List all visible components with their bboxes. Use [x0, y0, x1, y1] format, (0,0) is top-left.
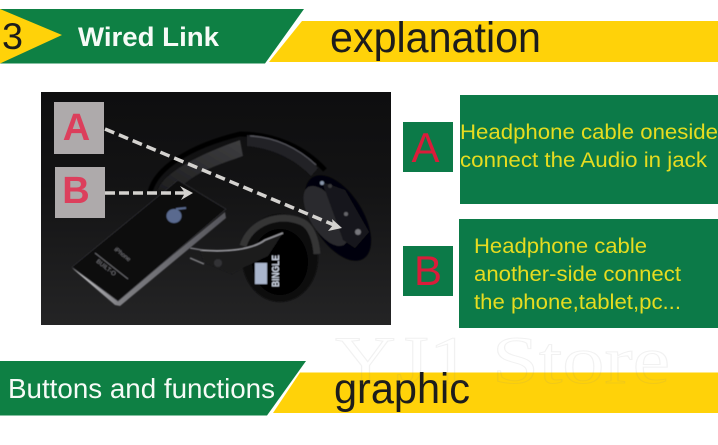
label box A [54, 102, 104, 154]
icon: smartphone: BUILT-O [95, 259, 117, 278]
label box B [55, 167, 105, 218]
padded band section [158, 140, 243, 192]
title: Wired Link: Wired Link [78, 22, 220, 52]
phone back [72, 180, 226, 301]
badge B: B [414, 247, 442, 294]
description A: Headphone cable oneside [460, 121, 718, 144]
panel: explanation A [403, 95, 718, 204]
lower arm [200, 235, 282, 268]
panel: explanation B [403, 219, 718, 328]
icon: smartphone: iPhone [113, 247, 132, 263]
text panel B [459, 219, 718, 328]
badge A: A [411, 124, 440, 171]
text panel A [460, 95, 718, 204]
heading: graphic: graphic [334, 365, 470, 413]
metal band section [247, 135, 318, 176]
watermark: YJ1 Store [335, 322, 670, 398]
yellow number arrow [0, 9, 62, 64]
label box B: B [62, 170, 90, 212]
photo background [41, 92, 391, 325]
headphone logo [255, 263, 267, 284]
headphone brand: BINGLE [271, 255, 282, 287]
panel: product photo with headphones and phone [41, 92, 391, 325]
right ear cup [305, 175, 372, 261]
phone fine print [95, 253, 128, 279]
description B: another-side connect [474, 263, 681, 286]
arrow: B to phone [105, 186, 193, 200]
green title ribbon [0, 9, 304, 64]
yellow explanation ribbon [269, 21, 718, 62]
number 3: 3 [2, 16, 23, 57]
outer headband [150, 134, 325, 192]
yellow ribbon [273, 372, 718, 413]
bottom header banner [0, 361, 718, 416]
top header banner [0, 9, 718, 64]
title: Buttons and functions: Buttons and functions [8, 373, 275, 404]
lower ear cup [242, 214, 318, 302]
arrow: A to audio jack [105, 129, 342, 231]
badge A [403, 122, 453, 172]
heading: explanation: explanation [330, 14, 541, 62]
badge B [403, 246, 453, 296]
description B: Headphone cable [474, 235, 647, 258]
description A: connect the Audio in jack [460, 149, 708, 172]
apple logo [166, 209, 182, 223]
label box A: A [63, 107, 90, 149]
icon: headphones [150, 134, 385, 302]
phone edge [72, 212, 226, 306]
green ribbon [0, 361, 306, 416]
icon: smartphone [72, 180, 226, 306]
description B: the phone,tablet,pc... [474, 291, 681, 314]
